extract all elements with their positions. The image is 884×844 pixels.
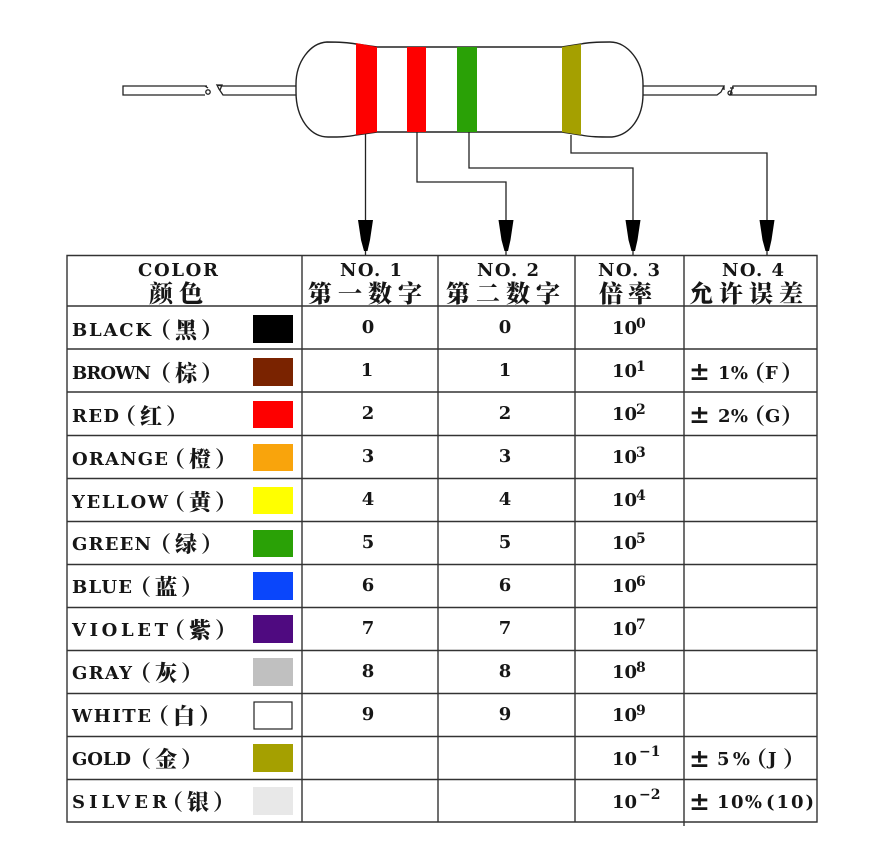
tolerance: 10% xyxy=(689,787,814,816)
row: white: 9 xyxy=(636,703,646,719)
row: black: （黑） xyxy=(149,314,227,345)
band 3: green xyxy=(457,47,477,132)
row: green: 5 xyxy=(362,532,374,553)
row: gray: 8 xyxy=(362,661,374,682)
tolerance: 2% G: ） xyxy=(781,400,803,431)
row: green: （绿） xyxy=(149,528,227,559)
row: yellow: 4 xyxy=(636,488,646,504)
tolerance: 2% G xyxy=(689,400,803,431)
row: orange: 10 xyxy=(612,447,637,468)
header: No.3: 倍率 xyxy=(599,274,657,309)
tolerance: 1% F: （ xyxy=(743,357,765,388)
row: gray: 10 xyxy=(612,662,637,683)
band 1: red xyxy=(356,43,377,135)
header: No.4: NO. 4 xyxy=(722,260,784,281)
row: black xyxy=(72,314,646,345)
row: gold: GOLD xyxy=(72,749,131,770)
row: yellow: 4 xyxy=(499,489,511,510)
table grid xyxy=(67,255,817,826)
tolerance: 1% F: F xyxy=(765,363,778,384)
row: silver: SILVER xyxy=(72,792,168,813)
row: green: GREEN xyxy=(72,534,151,555)
tolerance: 2% G: ± xyxy=(689,400,710,429)
row: black: 0 xyxy=(499,317,511,338)
header: No.1: 第一数字 xyxy=(308,274,428,309)
row: white: 9 xyxy=(362,704,374,725)
row: yellow: 10 xyxy=(612,490,637,511)
row: black: 0 xyxy=(636,316,646,332)
row: gray: 8 xyxy=(636,660,646,676)
row: silver: −2 xyxy=(639,787,660,803)
row: blue: BLUE xyxy=(72,577,132,598)
row: silver: 10 xyxy=(612,792,637,813)
row: violet xyxy=(71,614,646,645)
row: gray xyxy=(72,657,646,688)
row: yellow: （黄） xyxy=(163,486,241,517)
tolerance: 1% F: ） xyxy=(781,357,803,388)
row: blue: 6 xyxy=(362,575,374,596)
row: green: 10 xyxy=(612,533,637,554)
row: violet: 7 xyxy=(499,618,511,639)
row: black: 0 xyxy=(362,317,374,338)
row: orange xyxy=(72,443,646,474)
row: violet: 7 xyxy=(636,617,646,633)
tolerance: 1% F xyxy=(689,357,803,388)
header: No.2: 第二数字 xyxy=(446,274,566,309)
row: red: 2 xyxy=(499,403,511,424)
row: brown: BROWN xyxy=(72,363,151,384)
row: gold: （金） xyxy=(129,743,207,774)
row: gold: 10 xyxy=(612,749,637,770)
row: green xyxy=(72,528,646,559)
row: red: 2 xyxy=(636,402,646,418)
row: red: （红） xyxy=(114,400,192,431)
resistor diagram xyxy=(123,42,816,137)
row: silver xyxy=(72,786,814,817)
row: black: BLACK xyxy=(72,320,152,341)
tolerance: 1% F: ± xyxy=(689,357,710,386)
arrow: band 4 to No.4 xyxy=(571,135,774,255)
row: black: 10 xyxy=(612,318,637,339)
arrow: band 1 to No.1 xyxy=(358,134,373,255)
right lead xyxy=(643,86,816,95)
tolerance: 10%: (10) xyxy=(766,792,814,813)
row: red: 10 xyxy=(612,404,637,425)
tolerance: 2% G: 2% xyxy=(718,406,748,427)
header: No.4: 允许误差 xyxy=(689,274,809,309)
tolerance: 10%: ± xyxy=(689,787,710,816)
arrow: band 3 to No.3 xyxy=(469,132,640,255)
row: violet: VIOLET xyxy=(71,620,169,641)
row: blue: 10 xyxy=(612,576,637,597)
row: red: RED xyxy=(72,406,119,427)
row: gold: −1 xyxy=(639,744,660,760)
left lead xyxy=(123,85,296,95)
header: color xyxy=(138,260,219,309)
row: gray: （灰） xyxy=(129,657,207,688)
row: red xyxy=(72,400,803,431)
header: No.2: NO. 2 xyxy=(477,260,539,281)
row: gold xyxy=(72,743,805,774)
row: yellow xyxy=(71,486,646,517)
row: gray: 8 xyxy=(499,661,511,682)
row: violet: （紫） xyxy=(163,614,241,645)
tolerance: 2% G: G xyxy=(765,406,780,427)
header: No.3: NO. 3 xyxy=(598,260,660,281)
row: red: 2 xyxy=(362,403,374,424)
tolerance: 5% J: ± xyxy=(689,744,710,773)
row: green: 5 xyxy=(499,532,511,553)
row: brown: 1 xyxy=(499,360,511,381)
tolerance: 5% J xyxy=(689,743,805,774)
row: yellow: 4 xyxy=(362,489,374,510)
row: white: 10 xyxy=(612,705,637,726)
row: white: 9 xyxy=(499,704,511,725)
table header xyxy=(138,260,809,309)
header: color: COLOR xyxy=(138,260,219,281)
row: orange: ORANGE xyxy=(72,449,168,470)
row: silver: （银） xyxy=(161,786,239,817)
row: blue xyxy=(72,571,646,602)
tolerance: 5% J: （ xyxy=(745,743,767,774)
resistor body xyxy=(296,42,643,137)
header: No.3 xyxy=(598,260,660,309)
tolerance: 5% J: J xyxy=(766,749,777,770)
row: brown: 10 xyxy=(612,361,637,382)
row: brown xyxy=(72,357,803,388)
row: white: （白） xyxy=(147,700,225,731)
row: brown: 1 xyxy=(361,360,373,381)
row: violet: 7 xyxy=(362,618,374,639)
row: orange: （橙） xyxy=(163,443,241,474)
header: color: 颜色 xyxy=(149,274,209,309)
row: orange: 3 xyxy=(636,445,646,461)
row: gray: GRAY xyxy=(72,663,133,684)
row: yellow: YELLOW xyxy=(71,492,169,513)
row: brown: 1 xyxy=(636,359,646,375)
row: blue: 6 xyxy=(499,575,511,596)
header: No.1: NO. 1 xyxy=(340,260,402,281)
row: white xyxy=(71,700,646,731)
row: violet: 10 xyxy=(612,619,637,640)
band 4: gold xyxy=(562,44,581,135)
tolerance: 10%: 10% xyxy=(717,792,762,813)
tolerance: 1% F: 1% xyxy=(718,363,748,384)
row: blue: （蓝） xyxy=(129,571,207,602)
row: brown: （棕） xyxy=(149,357,227,388)
tolerance: 2% G: （ xyxy=(743,400,765,431)
row: green: 5 xyxy=(636,531,646,547)
row: white: WHITE xyxy=(71,706,151,727)
row: orange: 3 xyxy=(499,446,511,467)
row: orange: 3 xyxy=(362,446,374,467)
arrow: band 2 to No.2 xyxy=(417,132,514,255)
row: blue: 6 xyxy=(636,574,646,590)
tolerance: 5% J: ） xyxy=(783,743,805,774)
band 2: red xyxy=(407,47,426,132)
tolerance: 5% J: 5% xyxy=(717,749,750,770)
